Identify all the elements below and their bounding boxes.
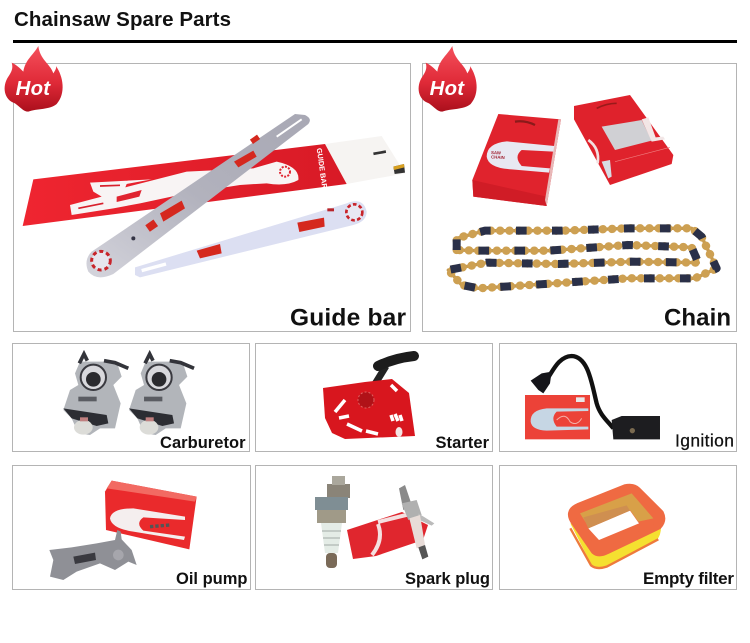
title rule (13, 40, 737, 43)
box: front: CHAIN (491, 154, 505, 160)
icon: recoil starter (323, 356, 415, 439)
packaging card (23, 136, 405, 226)
box: back (574, 95, 673, 185)
icon: ignition coil (525, 356, 660, 439)
short white bar (135, 201, 367, 277)
packaging card: GUIDE BAR (315, 147, 329, 190)
badge: hot chain (419, 46, 477, 112)
icon: right carburetor (129, 354, 194, 435)
title: Chainsaw Spare Parts (14, 8, 231, 31)
badge: hot guide bar: Hot (16, 78, 51, 100)
badge: hot chain: Hot (430, 78, 465, 100)
guide bar illustration (23, 114, 405, 277)
panel: guide bar (14, 64, 410, 332)
panel: starter (256, 344, 492, 452)
saw chain (448, 228, 717, 288)
panel: oil pump (12, 466, 250, 590)
label: oil pump: Oil pump (176, 570, 248, 588)
panel: empty filter (500, 466, 736, 590)
icon: left carburetor (63, 354, 128, 435)
label: starter: Starter (436, 434, 490, 452)
label: chain: Chain (664, 304, 731, 332)
long grey bar (86, 114, 310, 277)
label: ignition: Ignition (675, 430, 734, 450)
panel: spark plug (256, 466, 492, 590)
icon: air filter (570, 487, 662, 568)
box: front: SAW (491, 150, 502, 156)
panel: carburetor (12, 344, 250, 452)
icon: oil pump and box (49, 481, 197, 580)
label: guide bar: Guide bar (290, 304, 406, 332)
label: spark plug: Spark plug (405, 570, 490, 588)
icon: spark plugs and box (315, 476, 434, 568)
label: carburetor: Carburetor (160, 434, 246, 452)
panel: chain (422, 64, 736, 332)
chain illustration (448, 95, 717, 288)
label: empty filter: Empty filter (643, 569, 734, 588)
badge: hot guide bar (5, 46, 63, 112)
box: front (472, 114, 561, 206)
second spark plug (399, 485, 434, 559)
panel: ignition (500, 344, 736, 452)
